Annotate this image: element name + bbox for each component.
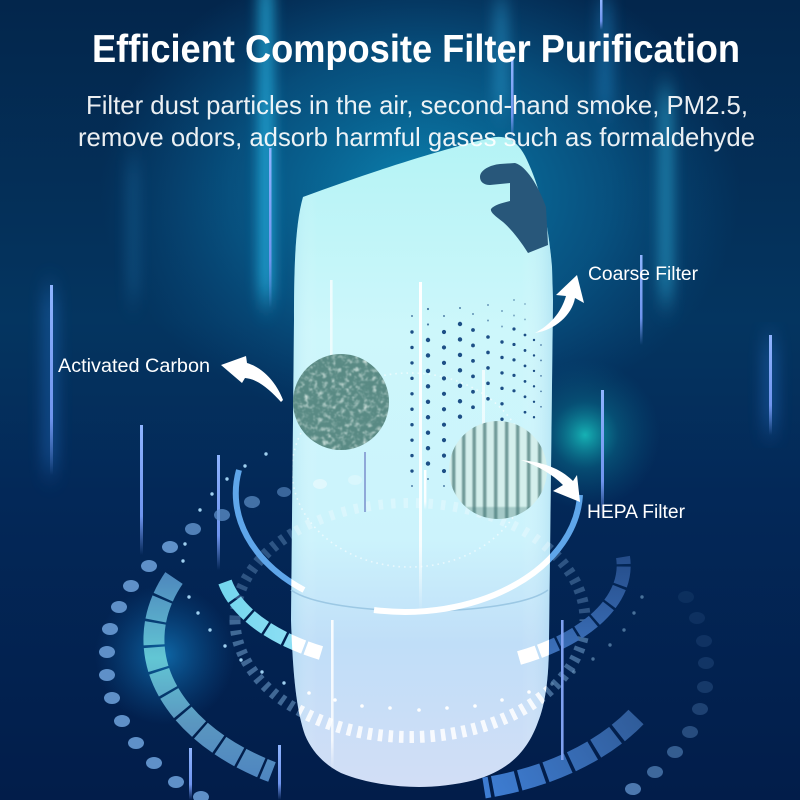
label: HEPA filter: HEPA Filter bbox=[587, 502, 686, 523]
solid ring bbox=[236, 470, 580, 612]
small dot ring bbox=[181, 452, 644, 686]
arrow: activated carbon bbox=[221, 356, 283, 402]
inner tick ring bbox=[235, 503, 585, 737]
subtitle bbox=[78, 90, 755, 152]
title: Efficient Composite Filter Purification bbox=[92, 28, 740, 71]
purifier device bbox=[291, 137, 553, 787]
air vent dot grid bbox=[412, 300, 541, 487]
activated carbon filter sample bbox=[293, 354, 389, 450]
arrow: HEPA filter bbox=[521, 460, 580, 502]
label: coarse filter: Coarse Filter bbox=[588, 264, 699, 285]
middle segmented ring bbox=[225, 557, 624, 658]
label: activated carbon: Activated Carbon bbox=[58, 356, 210, 377]
large segmented ring bbox=[154, 578, 636, 788]
body seam bbox=[291, 590, 548, 611]
HEPA filter sample bbox=[449, 421, 547, 519]
decorative dot ring bbox=[99, 487, 714, 800]
on-device ring highlights bbox=[291, 372, 550, 743]
arrow: coarse filter bbox=[535, 275, 584, 333]
subtitle: remove odors, adsorb harmful gases such as formaldehyde bbox=[78, 122, 755, 152]
white vertical lines on device bbox=[330, 280, 564, 770]
handle bbox=[480, 163, 548, 253]
subtitle: Filter dust particles in the air, second-hand smoke, PM2.5, bbox=[86, 90, 748, 120]
